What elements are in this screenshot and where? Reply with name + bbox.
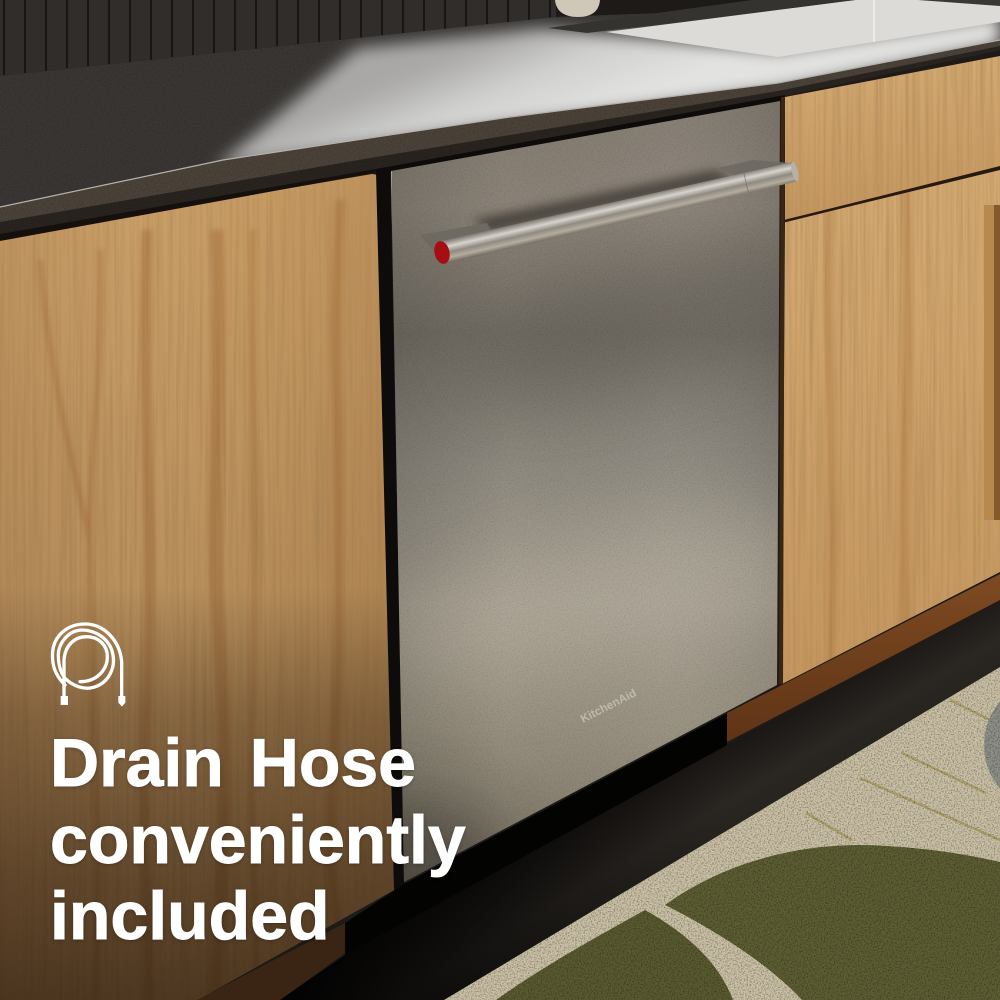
rug large green leaf bbox=[665, 845, 1000, 1000]
dishwasher door bbox=[391, 101, 780, 882]
counter light glare bbox=[215, 15, 1000, 168]
rug stripes bbox=[806, 699, 1000, 841]
dark gap beside dishwasher bbox=[376, 168, 405, 890]
door handle bbox=[420, 160, 800, 265]
dark floor strip bbox=[280, 600, 1000, 1000]
headline: conveniently bbox=[50, 802, 466, 878]
cabinet seams bbox=[785, 168, 1000, 221]
handle shadow bbox=[473, 170, 735, 232]
countertop bbox=[0, 0, 1000, 240]
wood toe kick right bbox=[727, 574, 1000, 742]
vase base on counter bbox=[555, 0, 600, 17]
rug gray circle bbox=[984, 702, 1000, 788]
icon: coiled drain hose bbox=[50, 622, 126, 706]
KitchenAid logo on door: KitchenAid bbox=[579, 687, 638, 726]
left wood cabinet bbox=[0, 174, 394, 1000]
backsplash tiles bbox=[0, 0, 556, 76]
lower right wood cabinet bbox=[780, 165, 1000, 690]
headline bbox=[50, 725, 466, 954]
sink basin bbox=[606, 0, 1000, 57]
red handle cap bbox=[432, 240, 452, 265]
sink lip bbox=[548, 0, 855, 33]
headline: Drain Hose bbox=[50, 725, 416, 801]
rug small green leaf bbox=[496, 910, 733, 1000]
upper right wood drawer bbox=[780, 50, 1000, 225]
counter front edge bbox=[0, 40, 1000, 234]
headline: included bbox=[50, 878, 330, 954]
shadow below dishwasher bbox=[345, 685, 782, 955]
wood toe kick left bbox=[197, 923, 345, 1000]
patterned rug bbox=[440, 660, 1000, 1000]
shadow under counter, left bbox=[0, 170, 378, 241]
